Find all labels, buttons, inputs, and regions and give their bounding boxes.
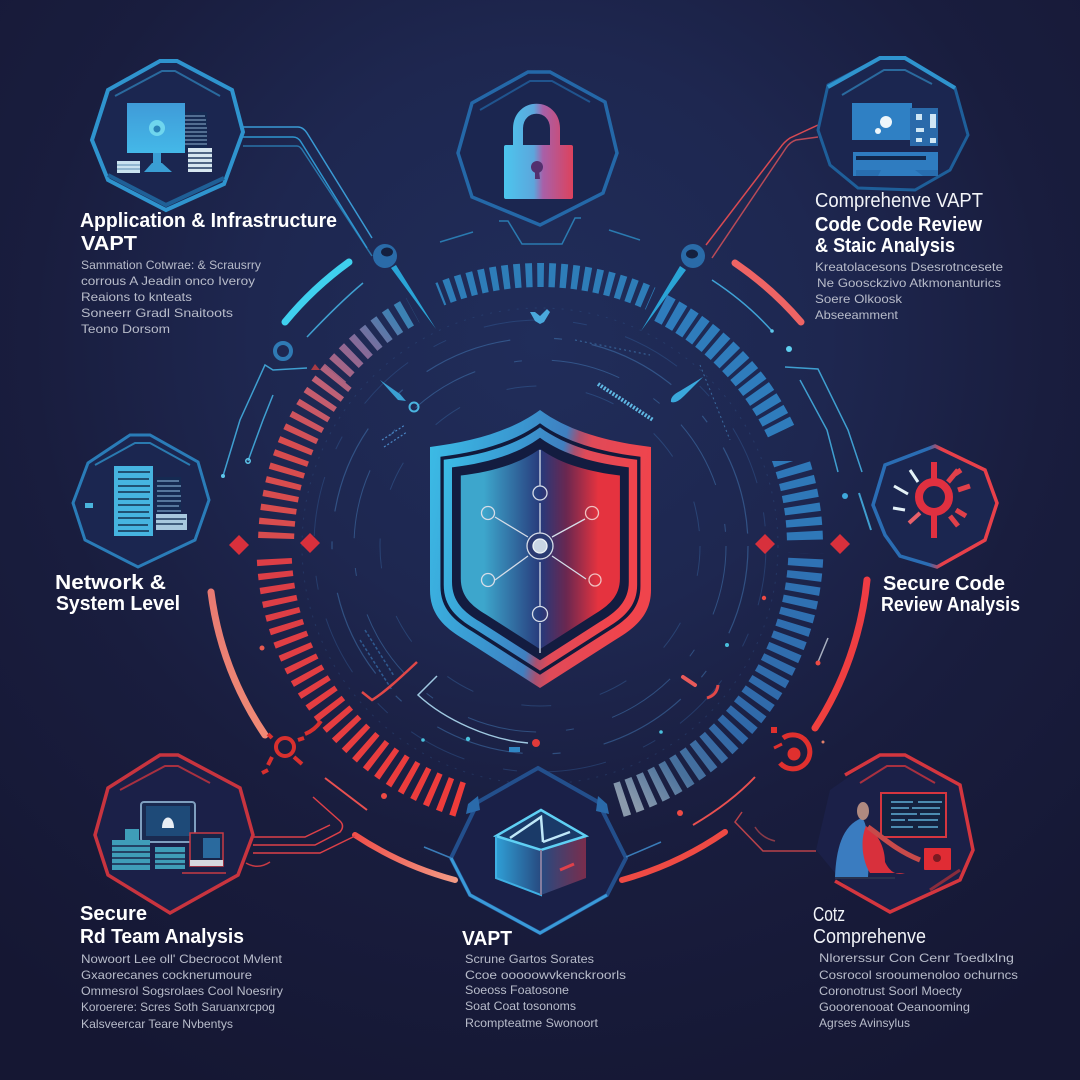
text block: red team details: Ommesrol Sogsrolaes Cool Noesriry (81, 984, 283, 998)
connector pin right (681, 244, 705, 268)
outer arc segments (211, 262, 867, 880)
text block: comprehensive details: Gooorenooat Oeanooming (819, 1000, 970, 1014)
connector lines: top right node (706, 125, 818, 258)
heading: VAPT: VAPT (462, 928, 512, 950)
text block: code review details (815, 260, 1003, 322)
text block: comprehensive details (819, 951, 1018, 1030)
text block: comprehensive details: Agrses Avinsylus (819, 1016, 910, 1030)
text block: code review details: Soere Olkoosk (815, 292, 903, 306)
text block: red team details: Nowoort Lee oll' Cbecrocot Mvlent (81, 952, 283, 966)
heading: network and system level: Network & (55, 572, 166, 594)
heading: application and infrastructure (80, 210, 337, 255)
tick ring: upper left red (258, 364, 352, 539)
tick ring: lower left red (256, 558, 466, 817)
heading: application and infrastructure: VAPT (81, 233, 137, 255)
text block: VAPT details (465, 952, 626, 1030)
text block: red team details (81, 952, 283, 1031)
icon: gauge left (380, 380, 418, 412)
text block: red team details: Gxaorecanes cocknerumoure (81, 968, 252, 982)
text block: red team details: Koroerere: Scres Soth Saruanxrcpog (81, 1000, 275, 1014)
text block: VAPT details: Scrune Gartos Sorates (465, 952, 594, 966)
tick ring: right blue (772, 461, 823, 540)
text block: VAPT details: Rcompteatme Swonoort (465, 1016, 599, 1030)
heading: code review (815, 190, 983, 257)
heading: comprehensive (813, 904, 926, 948)
text block: VAPT details: Soeoss Foatosone (465, 983, 569, 997)
panel: VAPT cube node (424, 768, 661, 933)
diamond markers (229, 533, 850, 555)
text block: application details: corrous A Jeadin onco Iveroy (81, 274, 255, 288)
icon: analyst at monitor (835, 793, 951, 878)
text block: VAPT details: Soat Coat tosonoms (465, 999, 576, 1013)
icon: padlock (504, 109, 573, 199)
thin accent lines and dots (221, 280, 871, 825)
heading: code review: & Staic Analysis (815, 235, 955, 257)
heading: red team analysis: Rd Team Analysis (80, 926, 244, 948)
panel: secure code review node (873, 446, 997, 567)
heading: comprehensive: Comprehenve (813, 926, 926, 948)
pin spike left (391, 265, 436, 329)
text block: application details: Sammation Cotwrae: & Scrausrry (81, 258, 261, 272)
icon: red target marker (771, 727, 824, 769)
pin spike right (641, 266, 686, 331)
icon: red flower marker (262, 721, 321, 773)
heading: secure code review analysis: Review Analysis (881, 594, 1020, 616)
heading: secure code review analysis (881, 573, 1020, 616)
icon: server documents (114, 466, 187, 536)
heading: red team analysis: Secure (80, 903, 147, 925)
small ring marker (275, 343, 291, 359)
panel: code review node (818, 58, 968, 190)
text block: code review details: Abseeamment (815, 308, 899, 322)
text block: comprehensive details: Cosrocol srooumenoloo ochurncs (819, 968, 1018, 982)
text block: application details: Reaions to knteats (81, 290, 192, 304)
icon: cube (496, 810, 586, 895)
text block: application details: Teono Dorsom (81, 322, 170, 336)
tick ring: lower right blue (614, 552, 824, 817)
text block: code review details: Ne Goosckzivo Atkmonanturics (817, 276, 1001, 290)
connector pin left (373, 244, 397, 268)
icon: red cog and spikes (893, 462, 970, 538)
heading: secure code review analysis: Secure Code (883, 573, 1005, 595)
text block: comprehensive details: Coronotrust Soorl Moecty (819, 984, 962, 998)
heading: network and system level (55, 572, 180, 615)
tick ring: top blue (436, 263, 656, 310)
icon: desktop computer (117, 103, 212, 173)
icon: gauge needle right (671, 377, 703, 402)
text block: code review details: Kreatolacesons Dsesrotncesete (815, 260, 1003, 274)
heading: code review: Code Code Review (815, 214, 982, 236)
text block: application details: Soneerr Gradl Snaitoots (81, 306, 233, 320)
network hub in shield (482, 450, 601, 653)
connector lines: top left node (243, 127, 372, 256)
tick ring: upper left top segment (324, 298, 420, 382)
icon: server console (852, 103, 938, 176)
text block: red team details: Kalsveercar Teare Nvbentys (81, 1017, 233, 1031)
inner technical rings (302, 308, 778, 784)
panel: red team node (95, 755, 253, 913)
panel: comprehensive analyst node (816, 755, 973, 912)
text block: comprehensive details: Nlorerssur Con Cenr Toedlxlng (819, 951, 1014, 965)
icon: top arrow marker (530, 309, 550, 324)
icon: workstation (112, 802, 226, 873)
heading: code review: Comprehenve VAPT (815, 190, 983, 212)
heading: red team analysis (80, 903, 244, 948)
heading: comprehensive: Cotz (813, 904, 845, 926)
connector lines: bottom left node (246, 797, 355, 866)
heading: network and system level: System Level (56, 593, 180, 615)
central shield (430, 410, 651, 688)
panel: network and system node (73, 435, 209, 567)
text block: VAPT details: Ccoe ooooowvkenckroorls (465, 968, 626, 982)
heading: application and infrastructure: Application & Infrastructure (80, 210, 337, 232)
tick ring: upper right blue (654, 295, 794, 438)
connector lines: bottom right node (735, 812, 816, 851)
panel: application and infrastructure node (92, 61, 243, 210)
text block: application details (81, 258, 261, 336)
panel: padlock node (440, 72, 640, 244)
